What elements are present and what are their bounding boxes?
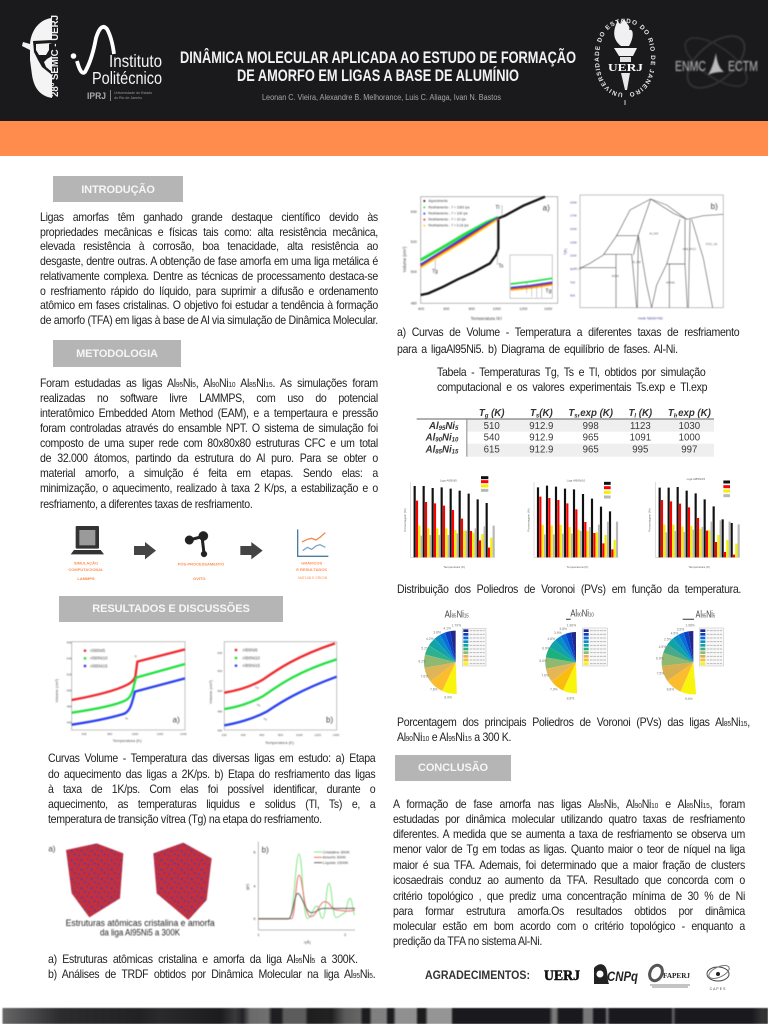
icon: laptop (71, 526, 104, 554)
text: introdução: Ligas amorfas têm ganhado grande destaque científico devido às (40, 210, 378, 224)
logo: CNPq (594, 964, 639, 984)
workflow labels: GRÁFICOS (301, 561, 323, 566)
pie 1 (418, 609, 486, 700)
text: introdução: o resfriamento rápido do líquido, para suprimir a difusão e ordenamento (40, 284, 378, 298)
caption: porcentagem (397, 715, 750, 744)
table: 1123 (630, 421, 651, 432)
chart a: Ts (498, 264, 504, 270)
chart a: 1400 (180, 732, 187, 736)
authors: Leonan C. Vieira, Alexandre B. Melhorance, Luis C. Aliaga, Ivan N. Bastos (262, 93, 501, 102)
text: curvas volume temperatura: temperatura de transição vítrea (Tg) na etapa do resfriamento. (48, 812, 322, 826)
chart a: Resfriamento - 7 = 0,16 /ps (428, 224, 469, 228)
pie 3: 8.8% (667, 688, 674, 692)
text: curvas volume temperatura: aquecimento, as temperaturas liquidus e solidus (Tl, Ts) e, a (48, 797, 375, 811)
chart b: 1400 (333, 733, 340, 737)
chart b: 600 (259, 733, 265, 737)
pie 2: 6.0% (539, 659, 547, 663)
bar chart 2: Temperatura (K) (567, 565, 588, 569)
chart b: 1200 (314, 733, 321, 737)
arrow (240, 542, 263, 559)
text: introdução: de amorfo (TFA) em ligas à base de Al via simulação de Dinâmica Molecular. (40, 313, 378, 327)
table: T (530, 408, 536, 419)
inset: Tg (545, 288, 552, 294)
table: 540 (484, 433, 500, 444)
table: 912.9 (529, 421, 553, 432)
pie 3: 1.96% (685, 624, 695, 628)
chart a: 500 (67, 688, 72, 692)
inset (510, 255, 552, 298)
logo: CAPES (707, 963, 731, 991)
pie 2: 3.8% (559, 627, 567, 631)
chart a: Aquecimento (428, 199, 448, 203)
title: DINÂMICA MOLECULAR APLICADA AO ESTUDO DE FORMAÇÃO (180, 47, 576, 67)
bar chart 2: Porcentagem (%) (526, 508, 530, 532)
chart b: 520 (217, 669, 223, 673)
pie 2: 4.8% (547, 637, 555, 641)
table: 1091 (630, 433, 651, 444)
chart: radial distribution: Líquido 1500K (323, 860, 349, 865)
chart b: Tg (255, 686, 259, 690)
pie 1: 7.6% (421, 675, 428, 679)
pie charts (418, 609, 724, 701)
pie 1: Al85Ni15 (445, 609, 469, 620)
table and bar charts (403, 408, 740, 569)
chart a: 480 (411, 301, 417, 305)
caption: curvas de volume (397, 325, 740, 356)
title (180, 47, 576, 85)
chart b (208, 642, 340, 745)
caption: porcentagem: Porcentagem dos principais Poliedros de Voronoi (PVs) das ligas Al85Ni15, (397, 715, 750, 729)
chart b: b) (326, 716, 333, 725)
text: introdução: propriedades mecânicas e físicas tais como: alta resistência mecânica, (40, 225, 378, 239)
chart: radial distribution: r(Å) (304, 939, 311, 944)
logo: UERJ seal: UERJ (608, 62, 644, 74)
text: metodologia: Foram estudadas as ligas Al95Ni5, Al90Ni10 Al85Ni15. As simulações foram (40, 376, 378, 390)
chart a: 1200 (519, 307, 527, 311)
table: 912.9 (529, 445, 553, 456)
header band (0, 0, 768, 121)
text: legenda estruturas (48, 952, 375, 981)
chart b: phase diagram (564, 195, 723, 320)
text: introdução: relativamente complexa. Dentre as técnicas de processamento destaca-se (40, 269, 378, 283)
chart: radial distribution (245, 842, 355, 944)
chart a: 500 (411, 270, 417, 274)
table: (K) (636, 408, 652, 419)
pie 1: 5.2% (421, 646, 429, 650)
chart a: 800 (469, 307, 475, 311)
text: legenda estruturas: a) Estruturas atômicas cristalina e amorfa da liga Al95Ni5 a 300K. (48, 952, 358, 966)
table: Al (429, 421, 439, 432)
bar chart 3: Temperatura (K) (688, 565, 710, 569)
pie 2: 1.96% (567, 624, 576, 628)
table: 997 (681, 445, 697, 456)
text: curvas volume temperatura: à taxa de 1K/ps. Com elas foi possível identificar, durante o (48, 782, 375, 796)
text: introdução: desgaste, dentre outras. A obtenção de fase amorfa em uma liga metálica é (40, 254, 378, 268)
logo: CAPES: CAPES (710, 987, 726, 991)
logo: Instituto Politécnico (71, 27, 162, 101)
chart a: Temperatura (K) (113, 738, 142, 743)
chart a: 1000 (493, 307, 501, 311)
chart a: Resfriamento - 7 = 1000 /ps (428, 205, 470, 209)
heading: resultados e discussões: RESULTADOS E DISCUSSÕES (92, 603, 250, 615)
logo: Instituto Politécnico: Instituto (109, 51, 162, 71)
text: metodologia: composto de uma super rede com 80x80x80 estruturas CFC e um total (40, 436, 378, 450)
pie 1: 1.79% (452, 624, 461, 628)
pie 2: 8.8% (567, 696, 574, 700)
chart a: Al85Ni15 (90, 663, 108, 668)
chart: radial distribution: 6 (253, 849, 256, 854)
chart: radial distribution: g(r) (245, 883, 250, 890)
chart a: 1400 (544, 307, 552, 311)
chart a: 520 (411, 240, 417, 244)
chart b: 400 (241, 733, 246, 737)
logo: UERJ: UERJ (544, 968, 580, 984)
chart: radial distribution: Cristalino 300K (323, 849, 350, 854)
cube: amorphous (153, 843, 212, 920)
pie 3: 9.4% (685, 697, 693, 701)
chart a: 520 (67, 672, 72, 676)
chart b: phase diagram: Al3Ni2 (666, 281, 675, 285)
chart b: phase diagram: Al_Ni2 (632, 260, 641, 264)
workflow labels: MATLAB E ORIGIN (298, 576, 328, 580)
chart a: Al95Ni5 (90, 648, 106, 653)
text: conclusão: menor valor de Tg em todas as ligas. Quanto maior o teor de níquel na liga (393, 842, 745, 856)
chart a: 560 (67, 640, 72, 644)
logo: ENMC ECTM: ENMC (675, 58, 706, 75)
logo: Instituto Politécnico: IPRJ (87, 91, 106, 101)
workflow labels: LAMMPS (77, 576, 95, 581)
table: 510 (484, 421, 500, 432)
text: conclusão: diferentes. A medida que se aumenta a taxa de resfriamento se observa um (393, 827, 745, 841)
table: 85 (435, 450, 443, 456)
text: conclusão: para formar estrutura amorfa.Os resultados obtidos por dinâmica (393, 904, 745, 918)
pie 2: 6.9% (542, 646, 550, 650)
chart b: 480 (217, 710, 223, 714)
chart b: phase diagram: FCC_A1 (706, 242, 718, 246)
pie 3: 2.5% (664, 638, 672, 642)
chart a: 1000 (132, 732, 139, 736)
bar chart 2 (526, 479, 618, 569)
chart b: phase diagram: Al_Ni3 (649, 231, 659, 235)
pie 2 (539, 609, 607, 700)
title: DE AMORFO EM LIGAS A BASE DE ALUMÍNIO (237, 66, 519, 85)
chart b: 460 (217, 728, 223, 732)
text: conclusão: estudadas por dinâmica molecular utilizando quatro taxas de resfriamento (393, 812, 745, 826)
bar chart 3: Liga Al85Ni15 (687, 477, 706, 481)
text: legenda estruturas: b) Análises de TRDF obtidos por Dinâmica Molecular na liga Al95Ni5. (48, 967, 375, 981)
pie 1: 4.2% (426, 637, 434, 641)
chart b: Al85Ni15 (242, 663, 260, 668)
chart b: phase diagram: 900 (570, 267, 575, 271)
logo: FAPERJ (647, 963, 691, 987)
pie 2: Al90Ni10 (570, 609, 594, 620)
icon: molecule (185, 531, 208, 557)
text: curvas volume temperatura (48, 751, 376, 826)
text: conclusão: critério topológico , que prediz uma concentração mínima de 30 % de Ni (393, 889, 745, 903)
chart: radial distribution: Amorfo 300K (323, 855, 346, 860)
text: conclusão: molecular estão em bom acordo com o critério topológico - enquanto a (393, 919, 745, 933)
chart b: Tg (257, 703, 260, 707)
table: 965 (583, 445, 599, 456)
logo: CNPq: CNPq (607, 969, 639, 984)
icon: chart (298, 529, 328, 556)
chart b: phase diagram: 1500 (570, 227, 577, 231)
text: conclusão: predição da TFA no sistema Al-Ni. (393, 934, 542, 948)
table: 998 (583, 421, 599, 432)
logo: 28 SEMIC UERJ: 28º SEMIC - UERJ (50, 15, 61, 97)
chart: radial distribution: 4 (253, 883, 256, 888)
chart b: phase diagram: Al_Ni (574, 266, 582, 270)
logo: Instituto Politécnico: Politécnico (92, 68, 162, 88)
bar chart 1 (403, 478, 495, 569)
pie 3 (656, 609, 723, 701)
table: 90 (435, 438, 443, 444)
chart b: 1000 (296, 733, 303, 737)
heading: tabela (437, 365, 708, 394)
chart b: phase diagram: 500 (570, 294, 575, 298)
workflow labels: OVITO (193, 576, 206, 581)
chart a: 600 (443, 307, 449, 311)
chart b: 500 (217, 689, 223, 693)
chart b: phase diagram: 1300 (570, 240, 577, 244)
chart a: Tg (432, 269, 438, 275)
table: l (674, 413, 676, 419)
text: metodologia: de 32.000 átomos, partindo da estrutura do Al puro. Para se obter o (40, 451, 378, 465)
chart a: 800 (107, 732, 113, 736)
table: 95 (439, 426, 446, 432)
chart a: 480 (67, 704, 72, 708)
logo: ENMC ECTM (675, 26, 758, 98)
table: 5 (455, 426, 459, 432)
cube caption: Estruturas atômicas cristalina e amorfa (66, 918, 215, 928)
chart b: 200 (222, 733, 227, 737)
bottom photo band (0, 1008, 768, 1024)
text: curvas volume temperatura: do aquecimento das ligas a 2K/ps. b) Etapa do resfriamento das ligas (48, 767, 375, 781)
pie 3: 6.9% (656, 656, 664, 660)
acknowledgements (425, 964, 730, 991)
pie 2: 3.9% (554, 631, 562, 635)
orange band (0, 121, 768, 156)
chart b: Al95Ni5 (242, 647, 258, 652)
table: 965 (583, 433, 599, 444)
heading: resultados e discussões (59, 596, 283, 622)
charts: volume curves and phase diagram (402, 194, 724, 321)
table: ,exp (K) (674, 408, 711, 419)
chart a: a) (543, 203, 550, 212)
table: Ni (442, 445, 452, 456)
chart a: Resfriamento - 7 = 100 /ps (428, 212, 468, 216)
chart a: Volume (cm³) (402, 246, 407, 272)
caption: distribuição: Distribuição dos Poliedros de Voronoi (PVs) em função da temperatura. (397, 582, 741, 596)
table: (K) (488, 408, 505, 419)
text: metodologia: resfriamento, a diferentes taxas de resfriamento. (40, 497, 252, 511)
text: introdução: elevada resistência à corrosão, boa tenacidade, alta resistência ao (40, 239, 378, 253)
chart a: 540 (67, 656, 72, 660)
table: 912.9 (529, 433, 553, 444)
caption: curvas de volume: a) Curvas de Volume - Temperatura a diferentes taxas de resfriamento (397, 325, 739, 339)
pie 3: 4.5% (659, 645, 666, 649)
figure: atomic structures and RDF (48, 841, 356, 945)
chart a: Resfriamento - 7 = 10 /ps (428, 218, 466, 222)
table: l (634, 413, 636, 419)
workflow labels: E RESULTADOS (296, 567, 327, 572)
chart a: 500 (82, 732, 87, 736)
cube caption: da liga Al95Ni5 a 300K (100, 927, 180, 937)
text: introdução: atômico em fases cristalinas. O objetivo foi estudar a tendência à formação (40, 298, 378, 312)
chart a: 1200 (157, 732, 164, 736)
heading: introdução (53, 176, 183, 202)
workflow labels: COMPUTACIONAL (68, 567, 104, 572)
arrow (134, 542, 156, 559)
pie 1: 4.1% (443, 626, 451, 630)
chart: radial distribution: 0 (253, 916, 256, 921)
workflow labels: PÓS-PROCESSAMENTO (178, 561, 224, 566)
chart a: a) (173, 716, 180, 725)
chart b: Al90Ni10 (242, 655, 260, 660)
text: metodologia: foram controladas através do ensamble NPT. O sistema de simulação foi (40, 421, 378, 435)
chart a: 460 (67, 720, 72, 724)
table: 995 (632, 445, 648, 456)
pie 1: 3.8% (433, 631, 441, 635)
chart b: phase diagram: 1700 (570, 214, 577, 218)
text: conclusão: A formação de fase amorfa nas ligas Al95Ni5, Al90Ni10 e Al85Ni15, foram (393, 797, 745, 811)
chart a: Ts (125, 716, 128, 720)
text: metodologia: material amorfo, a simulção é feita em etapas. Sendo elas: a (40, 466, 378, 480)
text: curvas volume temperatura: Curvas Volume - Temperatura das diversas ligas em estudo: a) Etapa (48, 751, 375, 765)
pie 2: 7.9% (550, 688, 558, 692)
chart b: 800 (278, 733, 283, 737)
chart a (402, 197, 558, 321)
chart b: Tg (263, 717, 267, 721)
chart b: Volume (cm³) (208, 680, 213, 704)
chart a: Tl (134, 654, 137, 658)
chart b: phase diagram: Al3Ni (612, 274, 619, 278)
text: introdução (40, 210, 378, 327)
table: g (484, 413, 489, 419)
chart: radial distribution: 1 (257, 932, 260, 937)
chart a: 540 (411, 210, 417, 214)
table: ,exp (K) (577, 408, 613, 419)
chart b: phase diagram: 1100 (570, 254, 577, 258)
logo: 28 SEMIC UERJ (22, 15, 61, 98)
chart: radial distribution: b) (262, 846, 269, 855)
table: Ni (445, 421, 455, 432)
table: Al (426, 445, 435, 456)
chart b: 540 (217, 651, 223, 655)
text: conclusão: icosaedrais conduz ao aumento da TFA. Resultado que concorda com o (393, 873, 745, 887)
chart a: Volume (cm³) (54, 678, 59, 703)
text: conclusão (393, 797, 746, 948)
chart a: Al90Ni10 (90, 656, 108, 661)
table: 15 (452, 450, 459, 456)
pie 3: 7.5% (657, 672, 664, 676)
heading: tabela: Tabela - Temperaturas Tg, Ts e Tl, obtidos por simulação (437, 365, 705, 379)
workflow labels: SIMULAÇÃO (74, 560, 98, 565)
chart b: phase diagram: b) (711, 202, 718, 211)
logo: Instituto Politécnico: Universidade do Estado (114, 91, 152, 95)
logo: FAPERJ: FAPERJ (663, 972, 691, 980)
heading: introdução: INTRODUÇÃO (81, 184, 155, 196)
text: metodologia: realizadas no software livre LAMMPS, com uso do potencial (40, 391, 378, 405)
table: 615 (484, 445, 500, 456)
acknowledgements: AGRADECIMENTOS: (425, 968, 530, 982)
pie 2: 7.6% (541, 674, 549, 678)
pie 1: 8.9% (444, 696, 452, 700)
table: 10 (452, 438, 459, 444)
figure: atomic structures and RDF: a) (48, 845, 56, 854)
text: conclusão: maior é sua TFA. Ademais, foi determinado que a maior fração de clusters (393, 858, 745, 872)
table: s (574, 413, 578, 419)
chart a: 400 (418, 307, 424, 311)
diagram: workflow (68, 526, 328, 581)
chart b: phase diagram: AlNi_FCC (683, 247, 697, 251)
table: 1000 (679, 433, 700, 444)
caption: porcentagem: Al90Ni10 e Al95Ni15 a 300 K. (397, 730, 511, 744)
workflow labels (68, 560, 328, 581)
heading: tabela: computacional e os valores experimentais Ts.exp e Tl.exp (437, 380, 707, 394)
bar chart 1: Porcentagem (%) (403, 508, 407, 532)
charts: volume versus temperature a and b (54, 640, 340, 746)
table: T (568, 408, 574, 419)
table: (K) (539, 408, 553, 419)
table (417, 408, 714, 457)
chart b: phase diagram: T(K) (564, 249, 568, 255)
chart b: phase diagram: 1900 (570, 200, 577, 204)
cube: crystalline (66, 843, 123, 917)
logo: UERJ seal: UNIVERSIDADE DO ESTADO DO RIO DE JANEIRO (594, 18, 656, 98)
heading: conclusão: CONCLUSÃO (418, 762, 488, 774)
chart b: phase diagram: 700 (570, 280, 575, 284)
caption: curvas de volume: para a ligaAl95Ni5. b) Diagrama de equilíbrio de fases. Al-Ni. (397, 342, 678, 356)
table: Al (426, 433, 435, 444)
pie 1: 6.2% (418, 660, 426, 664)
bar chart 1: Temperatura (K) (443, 565, 465, 569)
heading: conclusão (395, 755, 511, 781)
table: Ni (442, 433, 452, 444)
chart: radial distribution: 2 (344, 932, 347, 937)
table: T (668, 408, 674, 419)
chart a (54, 640, 187, 743)
bar chart 3: Porcentagem (%) (648, 508, 652, 532)
pie 1: 7.6% (430, 688, 438, 692)
text: metodologia: minimização, o aquecimento, realizado à taxa 2 K/ps, a estabilização e o (40, 481, 378, 495)
chart a: Tl (495, 205, 500, 211)
cube caption (66, 918, 215, 937)
pie 3: 3.5% (677, 628, 684, 632)
logo: Instituto Politécnico: do Rio de Janeiro (114, 96, 142, 100)
chart b: Temperatura (K) (265, 740, 295, 745)
text: metodologia (40, 376, 378, 511)
bar chart 3 (648, 477, 740, 569)
table: T (628, 408, 634, 419)
pie 3: 4.5% (671, 632, 678, 636)
pie 3: Al95Ni5 (696, 609, 715, 620)
table: 1030 (679, 421, 700, 432)
heading: metodologia (53, 340, 181, 367)
bar chart 2: Liga Al90Ni10 (567, 479, 586, 483)
table: s (536, 413, 540, 419)
table: T (479, 408, 485, 419)
heading: metodologia: METODOLOGIA (76, 348, 158, 360)
bar chart 1: Liga Al95Ni5 (440, 479, 457, 483)
text: metodologia: interatômico Embedded Atom Method (EAM), e a tempertaura e pressão (40, 406, 378, 420)
